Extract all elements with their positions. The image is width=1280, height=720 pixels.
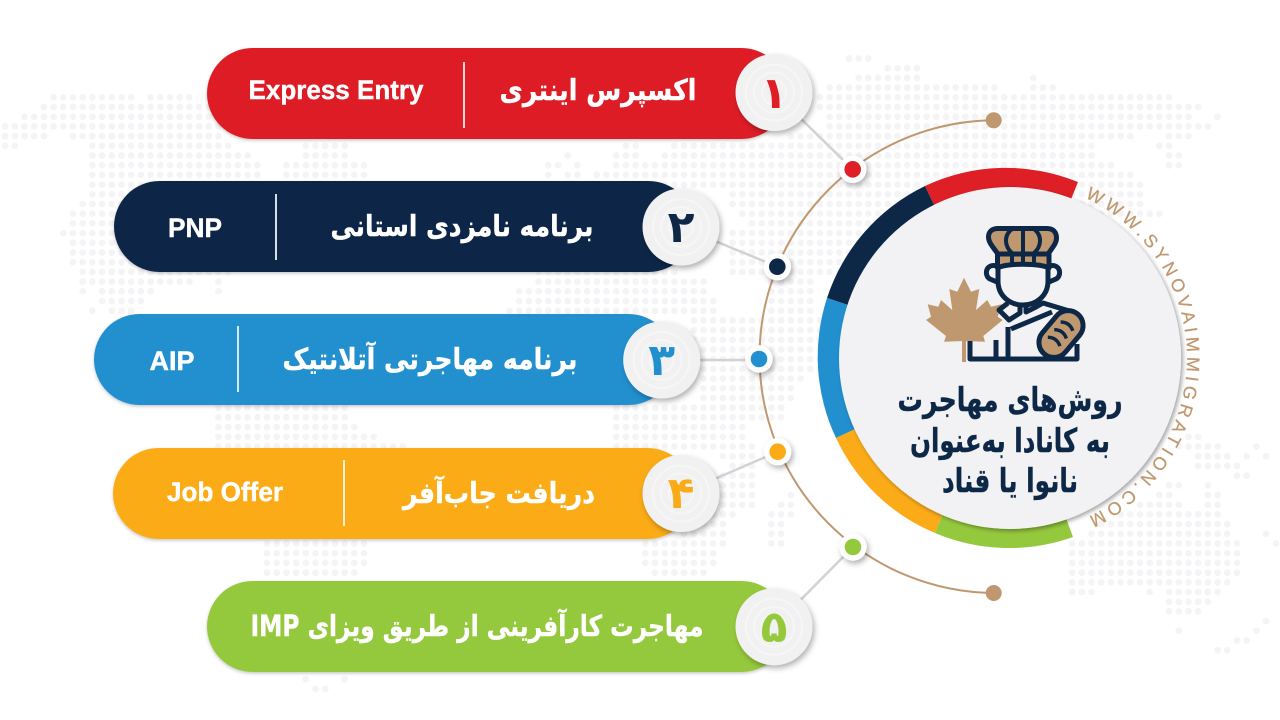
- curved tan timeline arc: [760, 112, 1002, 601]
- item 2: PNP: PNP: [168, 213, 222, 243]
- central title: [898, 380, 1122, 501]
- item 1: Express Entry: [207, 48, 812, 139]
- item 5: IMP: [207, 581, 812, 672]
- item 3: AIP: [94, 314, 700, 405]
- item 2: PNP: [114, 181, 720, 272]
- item 3: AIP: AIP: [150, 346, 194, 376]
- central title: روش‌های مهاجرت: [898, 380, 1122, 420]
- central title: به کانادا به‌عنوان: [910, 421, 1110, 461]
- item 1: Express Entry: اکسپرس اینتری: [500, 73, 696, 108]
- item 1: Express Entry: ۱: [761, 68, 787, 119]
- icon: chef with bread: [970, 228, 1089, 364]
- item 3: AIP: ۳: [648, 335, 675, 386]
- timeline nodes: [745, 156, 867, 561]
- circular website text: WWW.SYNOVAIMMIGRATION.COM: [1088, 186, 1200, 528]
- item 4: Job Offer: دریافت جاب‌آفر: [401, 475, 595, 510]
- item 5: IMP: مهاجرت کارآفرینی از طریق ویزای IMP: [251, 608, 704, 643]
- item 4: Job Offer: ۴: [668, 468, 694, 519]
- item 4: Job Offer: [113, 448, 720, 539]
- item 5: IMP: ۵: [761, 602, 787, 653]
- connector lines: [662, 92, 853, 627]
- coloured ring: [818, 168, 1078, 548]
- item 2: PNP: ۲: [668, 202, 695, 253]
- item 1: Express Entry: Express Entry: [248, 75, 424, 105]
- icon: maple leaf: [926, 278, 1003, 362]
- item 2: PNP: برنامه نامزدی استانی: [330, 209, 594, 243]
- item 3: AIP: برنامه مهاجرتی آتلانتیک: [282, 341, 578, 376]
- central disc: [839, 187, 1181, 529]
- central title: نانوا یا قناد: [942, 461, 1078, 501]
- item 4: Job Offer: Job Offer: [167, 477, 283, 507]
